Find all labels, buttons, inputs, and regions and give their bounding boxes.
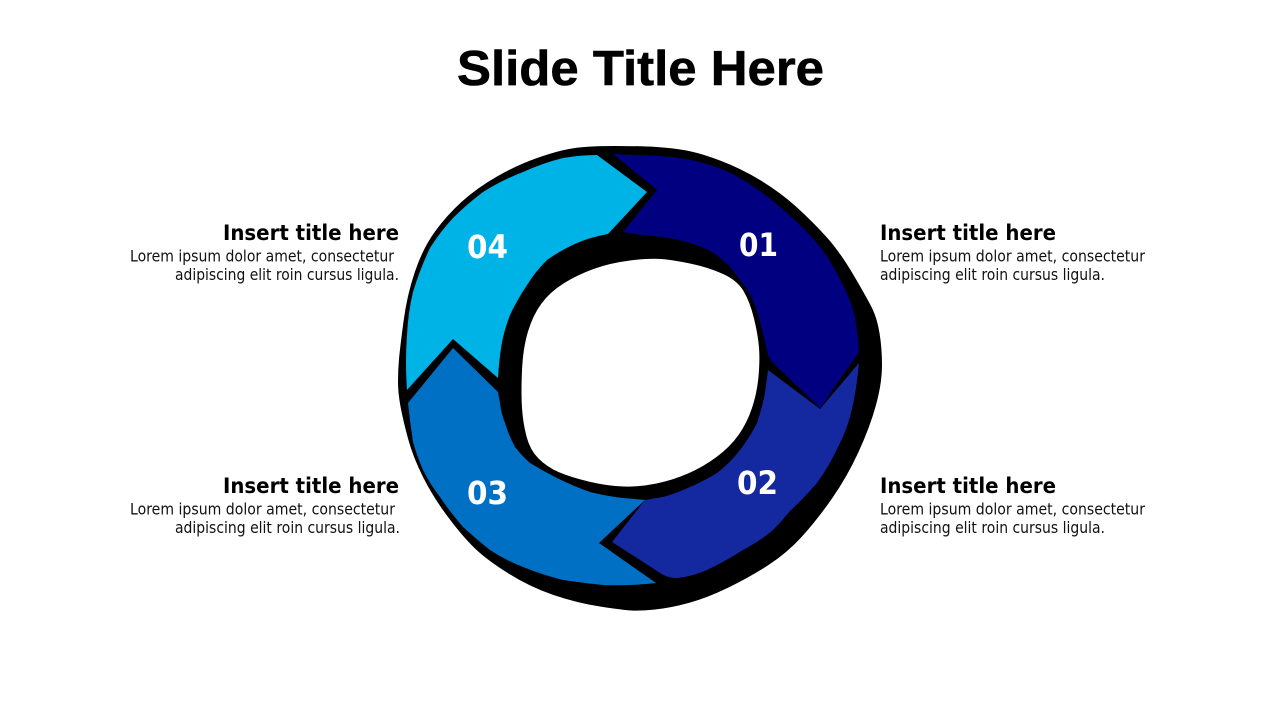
text block: top right	[880, 221, 1145, 284]
segment 04 arrow	[406, 155, 647, 390]
segment 03 arrow	[408, 348, 656, 585]
text block: bottom left: Insert title here	[223, 474, 399, 498]
text block: bottom left: adipiscing elit roin cursus ligula.	[175, 518, 400, 537]
text block: bottom right: Lorem ipsum dolor amet, consectetur	[880, 500, 1145, 518]
black ring backing	[398, 146, 882, 611]
number 03: 03	[467, 474, 508, 512]
text block: bottom left: Lorem ipsum dolor amet, consectetur	[130, 500, 395, 518]
number 04: 04	[467, 228, 508, 266]
text block: top left: Lorem ipsum dolor amet, consectetur	[130, 246, 394, 266]
text block: bottom right: adipiscing elit roin cursus ligula.	[880, 518, 1105, 537]
text block: top right: adipiscing elit roin cursus ligula.	[880, 265, 1105, 284]
segment 02 arrow	[612, 363, 859, 578]
title: Slide Title Here	[457, 42, 824, 96]
text block: bottom right	[880, 474, 1145, 537]
number 01: 01	[739, 226, 778, 264]
text block: bottom left	[130, 474, 400, 537]
number 02: 02	[737, 464, 778, 502]
segment 01 arrow	[613, 154, 859, 408]
text block: top right: Insert title here	[880, 221, 1056, 245]
text block: top left	[130, 221, 399, 284]
text block: bottom right: Insert title here	[880, 474, 1056, 498]
cycle diagram	[398, 146, 882, 611]
text block: top left: Insert title here	[223, 221, 399, 245]
text block: top right: Lorem ipsum dolor amet, consectetur	[880, 246, 1145, 266]
text block: top left: adipiscing elit roin cursus ligula.	[175, 265, 399, 284]
